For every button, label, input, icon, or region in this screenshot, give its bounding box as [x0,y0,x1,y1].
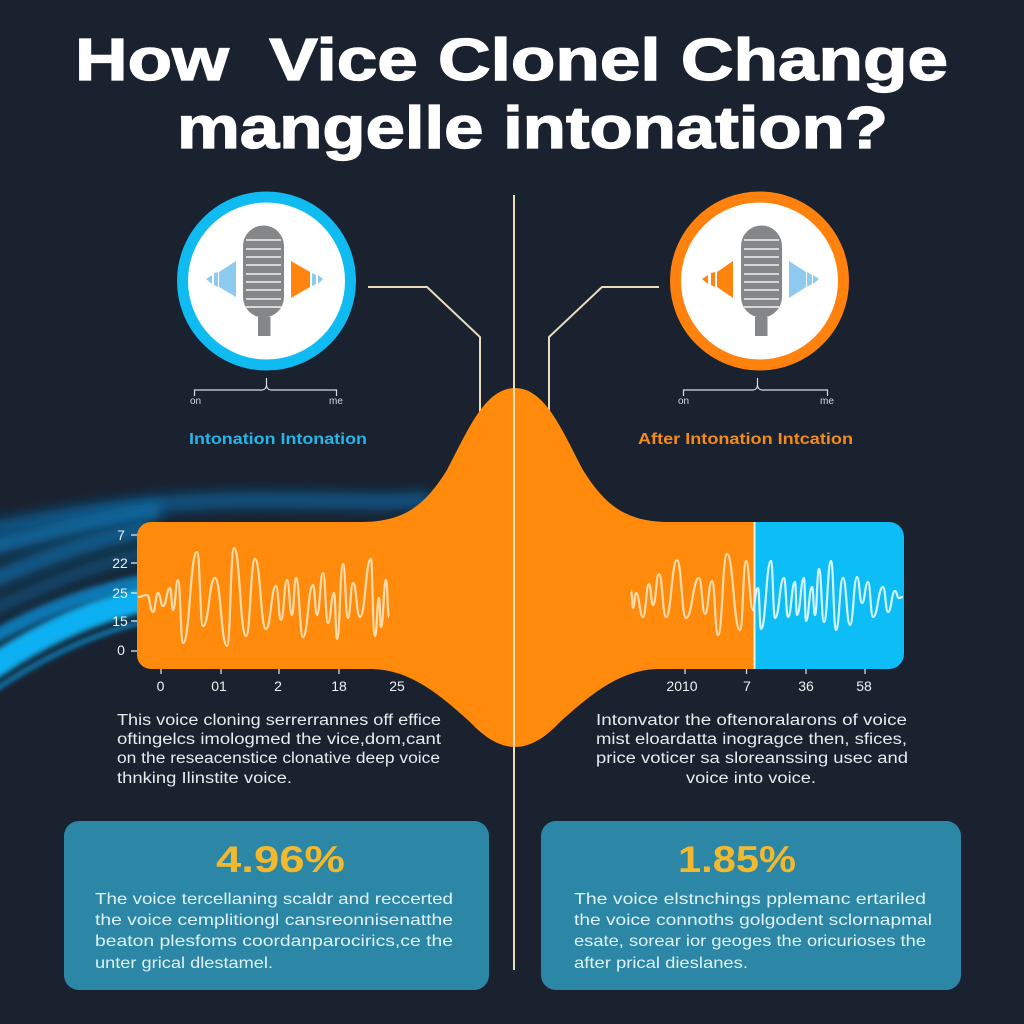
card text: right [574,891,932,972]
text block: left description: This voice cloning serrerrannes off effice [117,712,441,729]
chart axis: left x labels: 0 [157,678,165,694]
connector: right microphone to centre [549,287,659,412]
chart axis: left y labels: 15 [112,613,128,629]
heading: before label: Intonation Intonation [189,431,367,448]
icon: before microphone [182,197,350,365]
icon: after microphone [676,197,844,365]
chart axis: left x labels: 2 [274,678,282,694]
text block: right description: Intonvator the oftenoralarons of voice [596,712,907,729]
bracket scale: left [190,378,343,407]
text block: left description: thnking Ilinstite voice. [117,770,292,787]
bracket scale: right: me [820,396,834,407]
chart axis: right x labels: 58 [856,678,872,694]
chart axis: left y labels: 25 [112,585,128,601]
chart axis: right x labels: 7 [743,678,751,694]
title: mangelle intonation? [177,95,888,161]
statistic: 4.96%: 4.96% [216,839,345,880]
chart axis: left x labels [157,669,405,694]
text block: left description: on the reseacenstice clonative deep voice [117,750,440,767]
chart axis: left y labels: 0 [117,642,125,658]
text block: left description: oftingelcs imologmed the vice,dom,cant [117,731,442,748]
card text: right: after prical dieslanes. [574,955,748,972]
chart axis: left y labels: 22 [112,555,128,571]
title [75,27,948,161]
bracket scale: right [678,378,834,407]
card text: right: The voice elstnchings pplemanc ertariled [574,891,926,908]
waveform: after, blue section [753,561,903,630]
chart axis: left x labels: 25 [389,678,405,694]
bracket scale: left: me [329,396,343,407]
centre divider line [513,195,515,970]
text block: right description: mist eloardatta inogragce then, sfices, [596,731,907,748]
decorative blue light streaks [0,500,430,700]
card text: right: the voice connoths golgodent sclornapmal [574,912,932,929]
statistic: 1.85%: 1.85% [678,839,796,880]
card text: left: unter grical dlestamel. [95,955,273,972]
waveform: after, orange section [631,554,753,635]
connector: left microphone to centre [368,287,480,412]
chart: central orange waveform panel [137,388,904,747]
text block: right description: price voticer sa sloreanssing usec and [596,750,908,767]
text block: right description [596,712,908,787]
card text: left: the voice cemplitiongl cansreonnisenatthe [95,912,453,929]
chart axis: right x labels: 36 [798,678,814,694]
chart axis: right x labels [666,669,872,694]
chart axis: left x labels: 01 [211,678,227,694]
chart axis: left y labels: 7 [117,527,125,543]
text block: right description: voice into voice. [686,770,816,787]
text block: left description [117,712,442,787]
heading: after label: After Intonation Intcation [638,431,853,448]
bracket scale: left: on [190,396,201,407]
panel: left statistic card [64,821,489,990]
chart axis: left x labels: 18 [331,678,347,694]
waveform: before [138,548,389,646]
chart axis: right x labels: 2010 [666,678,698,694]
bracket scale: right: on [678,396,689,407]
card text: left: The voice tercellaning scaldr and reccerted [95,891,453,908]
card text: left [95,891,453,972]
panel: right statistic card [541,821,961,990]
title: How Vice Clonel Change [75,27,948,93]
card text: left: beaton plesfoms coordanparocirics,ce the [95,933,453,950]
card text: right: esate, sorear ior geoges the oricurioses the [574,933,926,950]
chart axis: left y labels [112,527,137,658]
